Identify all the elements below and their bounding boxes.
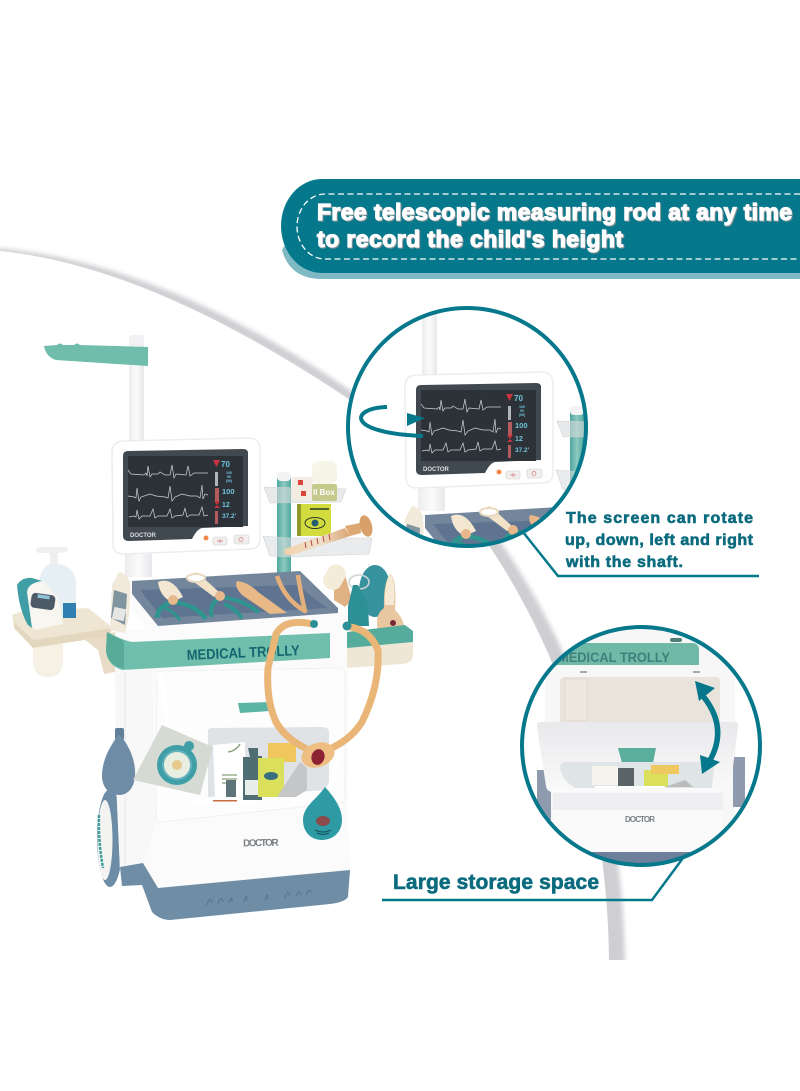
lower shelf (263, 536, 372, 557)
green guard band (106, 632, 330, 670)
background curved arc (0, 248, 625, 966)
storage callout leader line (382, 858, 683, 900)
open flap (537, 722, 738, 792)
bandage roll (292, 477, 313, 500)
vital sign readouts: 100 (222, 487, 235, 496)
dark nub (670, 638, 682, 642)
drawer opening (560, 677, 720, 722)
monitor buttons (204, 535, 249, 545)
circle fill (522, 627, 760, 865)
lower body label: DOCTOR (243, 838, 279, 849)
eye care box (297, 504, 331, 536)
right side tray (320, 561, 413, 668)
base (120, 863, 350, 920)
scissors one (157, 581, 206, 620)
soap bottle (36, 547, 76, 618)
base strip (592, 852, 690, 863)
chest piece (298, 738, 338, 772)
vital sign readouts: 100 (226, 471, 232, 475)
drawer contents (592, 765, 693, 788)
banner: telescopic measuring rod (281, 179, 800, 279)
enlarged trolley top (404, 314, 584, 544)
body back (545, 630, 735, 865)
band text: MEDICAL TROLLY (558, 650, 670, 665)
vital sign readouts (213, 460, 237, 524)
circle outline (522, 627, 760, 865)
rotation callout leader line (523, 532, 759, 576)
measuring sign (44, 335, 148, 366)
rotation callout text: up, down, left and right (565, 532, 754, 549)
vital sign readouts: 37.2' (222, 513, 237, 520)
banner body (281, 179, 800, 273)
left tray (12, 547, 115, 677)
side tag (110, 572, 130, 633)
side wheels (537, 770, 551, 820)
banner dashed outline (297, 194, 800, 259)
banner text line 2: to record the child's height (317, 226, 623, 252)
hinge marks (580, 671, 700, 673)
lower body (553, 793, 723, 853)
reflex hammer (320, 561, 352, 607)
banner text line 1: Free telescopic measuring rod at any time (317, 199, 792, 225)
enlarged green band (555, 643, 699, 665)
drawer front (156, 668, 345, 822)
holder capsule (33, 644, 63, 677)
vital sign readouts: 70 (221, 460, 230, 469)
eartips (310, 620, 318, 628)
flap handle (618, 748, 656, 763)
stethoscope (268, 620, 378, 772)
rotation arrow (361, 407, 425, 436)
drawer handle (238, 702, 270, 713)
enlarged open drawer (537, 630, 745, 868)
measuring pole (129, 335, 144, 445)
wheel (97, 789, 123, 887)
flap window (560, 762, 714, 788)
teal column (277, 472, 291, 574)
band label: MEDICAL TROLLY (186, 643, 300, 664)
circle outline (348, 308, 586, 546)
tan spatula (236, 581, 287, 614)
ECG traces (128, 465, 208, 519)
lower label: DOCTOR (625, 815, 655, 824)
monitor screen (123, 449, 248, 541)
screen display area (128, 456, 243, 527)
banner shadow (282, 185, 800, 279)
cuff dial (157, 745, 197, 785)
trolley body (115, 620, 350, 892)
squeeze bulb (102, 728, 135, 795)
scissors two (186, 572, 259, 618)
monitor (112, 438, 260, 554)
instrument tray (132, 571, 347, 650)
tan tweezers (277, 575, 305, 611)
storage callout text: Large storage space (393, 871, 599, 894)
open-close arrow (695, 681, 720, 774)
circle fill (348, 308, 586, 546)
otoscope (377, 573, 404, 631)
magnifier: storage drawer (522, 627, 760, 868)
rotation callout text: with the shaft. (565, 554, 683, 571)
rotation callout text: The screen can rotate (566, 510, 753, 527)
vital sign readouts: (90) (226, 479, 232, 483)
trolley upper section (106, 335, 372, 670)
syringe (284, 514, 375, 555)
drawer window with contents (190, 727, 329, 804)
rotation callout text (565, 510, 754, 571)
teal ball (359, 565, 391, 617)
magnifier: rotating screen (346, 306, 588, 548)
vital sign readouts: 12 (222, 502, 230, 509)
pill jar (312, 461, 337, 501)
pressure meter (17, 578, 63, 630)
upper shelf (264, 487, 346, 503)
monitor neck (125, 550, 152, 577)
monitor bezel (112, 438, 260, 554)
monitor brand: DOCTOR (130, 533, 157, 539)
small teal bulb (348, 585, 369, 626)
blood pressure cuff (133, 672, 213, 795)
pill jar: ll Box (313, 488, 335, 497)
key ring (349, 575, 369, 589)
trolley illustration (12, 335, 413, 920)
hanging teal bulb (303, 737, 342, 840)
vital sign readouts: 90 (227, 475, 231, 479)
